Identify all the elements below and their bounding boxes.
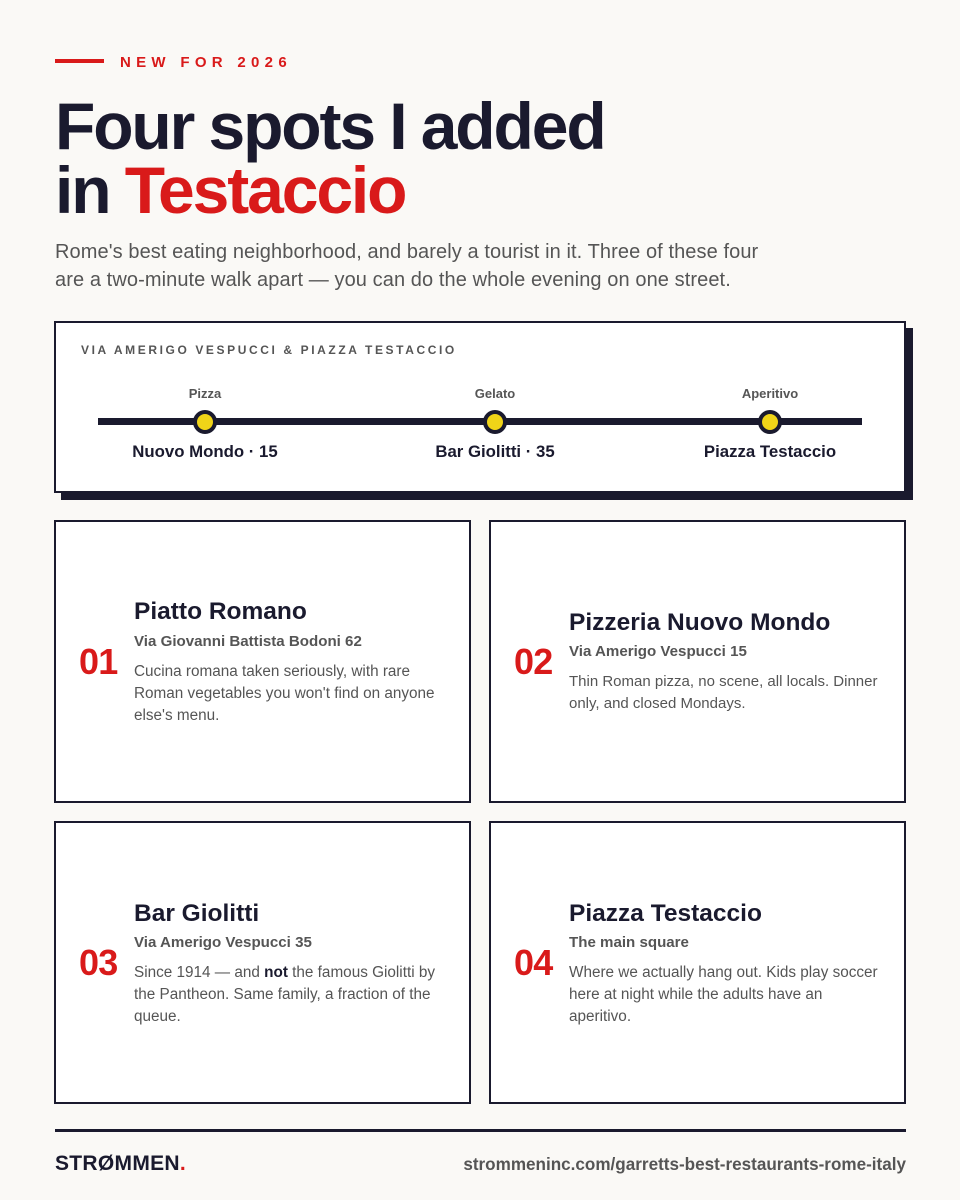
stop name: Piazza Testaccio — [704, 442, 836, 461]
description — [569, 673, 878, 712]
footer — [55, 1129, 906, 1175]
panel: card 01 — [54, 520, 471, 803]
stop marker — [758, 410, 782, 434]
stop: Piazza Testaccio — [704, 386, 836, 461]
eyebrow — [55, 54, 292, 71]
number: 04 — [514, 942, 552, 983]
source url: strommeninc.com/garretts-best-restaurants-rome-italy — [463, 1155, 906, 1174]
stop marker — [483, 410, 507, 434]
stop name: Nuovo Mondo · 15 — [132, 442, 278, 461]
description — [134, 964, 435, 1025]
intro text: Rome's best eating neighborhood, and barely a tourist in it. Three of these four — [55, 241, 758, 263]
panel: card 04 — [489, 821, 906, 1104]
description: Cucina romana taken seriously, with rare — [134, 663, 410, 680]
street line — [98, 418, 862, 425]
address: The main square — [569, 934, 689, 951]
brand logo: STRØMMEN. — [55, 1152, 186, 1175]
address: Via Giovanni Battista Bodoni 62 — [134, 633, 362, 650]
title: in Testaccio — [55, 153, 405, 227]
description: Thin Roman pizza, no scene, all locals. Dinner — [569, 673, 877, 690]
description: queue. — [134, 1008, 181, 1025]
intro text — [55, 241, 758, 291]
stop name: Bar Giolitti · 35 — [435, 442, 555, 461]
place name: Piazza Testaccio — [569, 900, 762, 927]
title — [55, 89, 605, 227]
stop category: Pizza — [189, 386, 221, 401]
number: 03 — [79, 942, 117, 983]
map heading: VIA AMERIGO VESPUCCI & PIAZZA TESTACCIO — [81, 343, 457, 357]
description: else's menu. — [134, 707, 219, 724]
description: Roman vegetables you won't find on anyone — [134, 685, 435, 702]
description — [134, 663, 435, 724]
place name: Pizzeria Nuovo Mondo — [569, 609, 830, 636]
address: Via Amerigo Vespucci 35 — [134, 934, 312, 951]
stop: Bar Giolitti — [435, 386, 555, 461]
stop: Nuovo Mondo — [132, 386, 278, 461]
number: 01 — [79, 641, 117, 682]
address: Via Amerigo Vespucci 15 — [569, 643, 747, 660]
panel: street line map — [54, 321, 913, 500]
description: aperitivo. — [569, 1008, 631, 1025]
stop category: Aperitivo — [742, 386, 798, 401]
title: Four spots I added — [55, 89, 605, 163]
place name: Bar Giolitti — [134, 900, 259, 927]
description: Where we actually hang out. Kids play soccer — [569, 964, 878, 981]
description: only, and closed Mondays. — [569, 695, 746, 712]
stop category: Gelato — [475, 386, 515, 401]
panel: card 02 — [489, 520, 906, 803]
footer rule — [55, 1129, 906, 1132]
description — [569, 964, 878, 1025]
panel shadow — [61, 328, 913, 500]
number: 02 — [514, 641, 552, 682]
eyebrow rule — [55, 59, 104, 63]
place name: Piatto Romano — [134, 598, 307, 625]
intro text: are a two-minute walk apart — you can do the whole evening on one street. — [55, 269, 731, 291]
description: Since 1914 — and not the famous Giolitti by — [134, 964, 435, 981]
description: the Pantheon. Same family, a fraction of the — [134, 986, 430, 1003]
description: here at night while the adults have an — [569, 986, 822, 1003]
panel box — [54, 321, 906, 493]
stop marker — [193, 410, 217, 434]
eyebrow text: NEW FOR 2026 — [120, 54, 292, 71]
panel: card 03 — [54, 821, 471, 1104]
